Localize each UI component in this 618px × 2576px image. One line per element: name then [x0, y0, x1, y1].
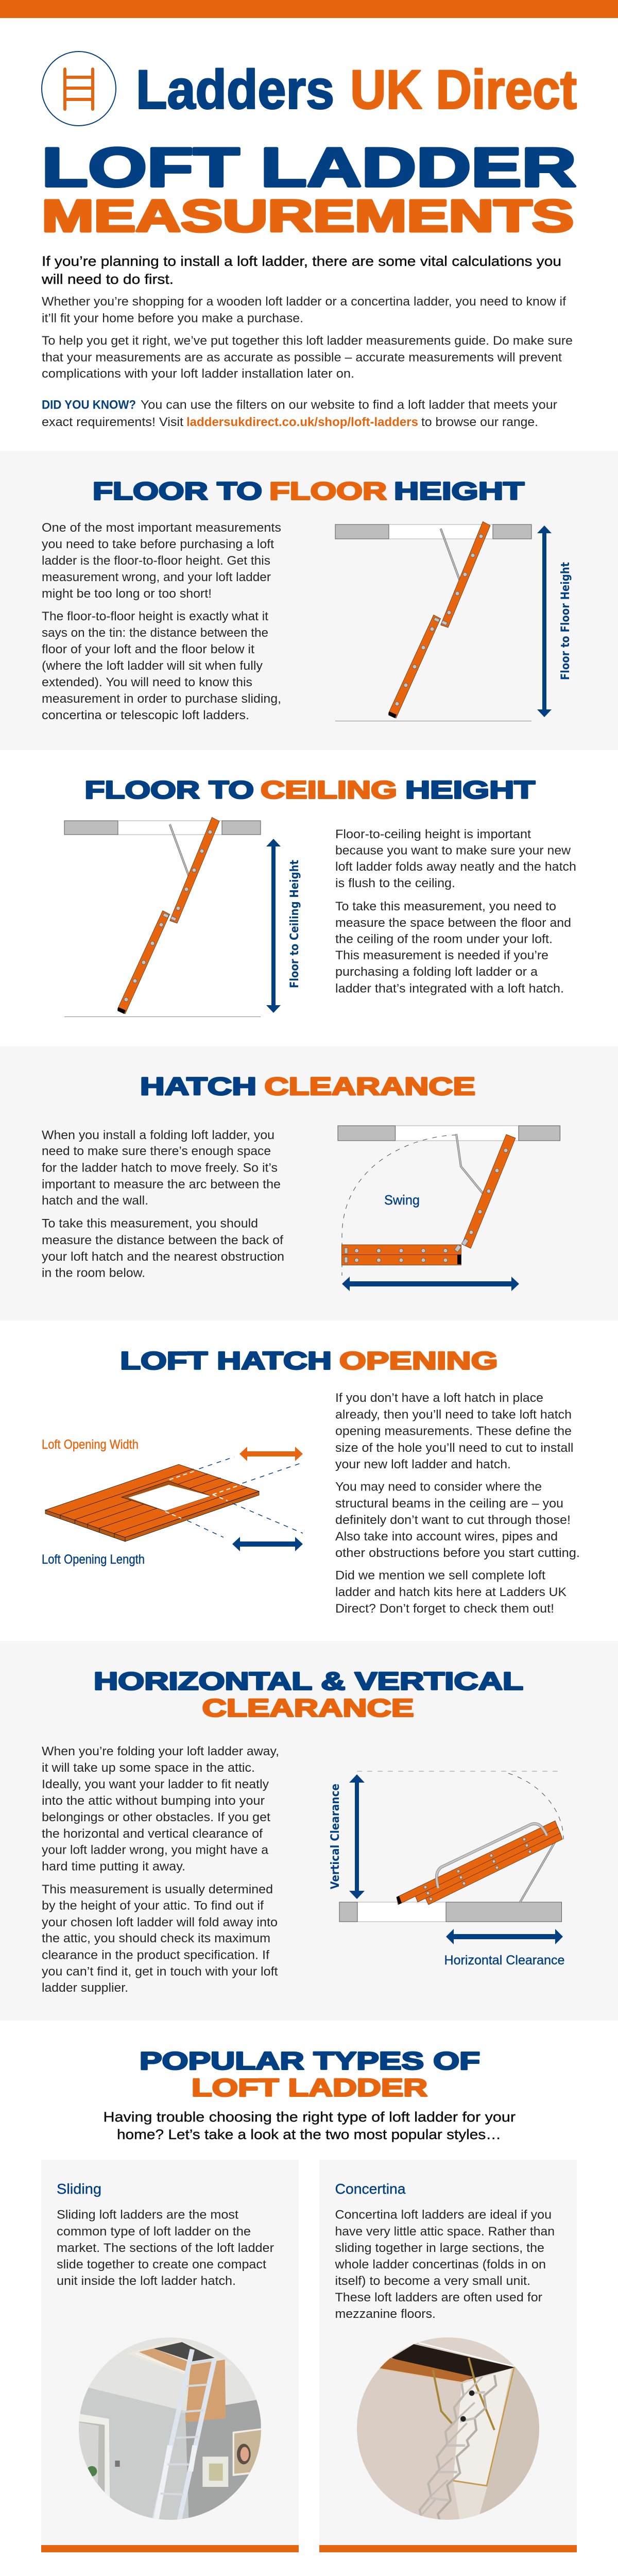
text: concertina	[334, 2208, 555, 2321]
intro body text: exact requirements! Visit	[42, 415, 183, 429]
heading: floor to ceiling height: HEIGHT	[405, 777, 535, 804]
text: floor to ceiling: loft ladder folds away neatly and the hatch	[335, 860, 576, 874]
text: clearance: the horizontal and vertical clearance of	[42, 1827, 263, 1841]
intro lead text: If you’re planning to install a loft ladder, there are some vital calculations you	[42, 253, 561, 269]
text: floor to floor: (where the loft ladder will sit when fully	[42, 659, 263, 673]
text: sliding: market. The sections of the loft ladder	[57, 2241, 274, 2255]
text: loft hatch opening: You may need to consider where the	[335, 1480, 542, 1494]
text: loft hatch opening: If you don’t have a loft hatch in place	[335, 1391, 543, 1405]
text: floor to floor: you need to take before purchasing a loft	[42, 537, 274, 551]
text: floor to floor: ladder is the floor-to-floor height. Get this	[42, 554, 270, 568]
text: clearance: your chosen loft ladder will fold away into	[42, 1916, 278, 1929]
text: floor to ceiling: is flush to the ceiling.	[335, 876, 455, 890]
heading: popular types of loft ladder	[140, 2047, 480, 2102]
heading: floor to floor height: FLOOR	[269, 478, 387, 505]
text: loft hatch opening: opening measurements. These define the	[335, 1425, 572, 1438]
heading: floor to floor height: FLOOR TO	[93, 478, 262, 505]
panel: hatch clearance	[0, 1046, 618, 1320]
text: concertina: itself) to become a very small unit.	[335, 2274, 530, 2288]
icon: ladder in circle	[42, 52, 116, 126]
text: sliding: common type of loft ladder on the	[57, 2225, 251, 2239]
heading: popular types of loft ladder: LOFT LADDER	[192, 2074, 427, 2102]
text: loft hatch opening: Direct? Don’t forget to check them out!	[335, 1602, 554, 1616]
arrow: floor to ceiling	[266, 839, 281, 1013]
text: concertina: whole ladder concertinas (folds in on	[334, 2258, 546, 2272]
logo wordmark	[136, 59, 577, 121]
arrow: opening width	[239, 1447, 303, 1461]
text: floor to floor: One of the most important measurements	[42, 521, 281, 535]
panel: horizontal and vertical clearance	[0, 1641, 618, 2021]
text: sliding: slide together to create one compact	[57, 2258, 266, 2272]
text: floor to ceiling: the ceiling of the room under your loft.	[335, 933, 553, 946]
text: loft hatch opening: Also take into account wires, pipes and	[335, 1530, 558, 1544]
intro body text: laddersukdirect.co.uk/shop/loft-ladders	[186, 415, 418, 429]
intro body text: complications with your loft ladder installation later on.	[42, 367, 354, 381]
text: floor to ceiling: measure the space between the floor and	[335, 916, 571, 930]
diagram: loft floor with opening	[45, 1457, 303, 1541]
text: floor to ceiling: Floor-to-ceiling height is important	[335, 827, 531, 841]
text: sliding: unit inside the loft ladder hatch.	[57, 2274, 236, 2288]
text: concertina: mezzanine floors.	[335, 2307, 436, 2321]
text: floor to floor: might be too long or too short!	[42, 587, 212, 601]
subheading: types: Having trouble choosing the right type of loft ladder for your	[103, 2109, 516, 2125]
text: concertina: have very little attic space. Rather than	[335, 2225, 555, 2239]
title: MEASUREMENTS	[42, 191, 574, 241]
label: floor to floor height: Floor to Floor Height	[559, 562, 572, 680]
text: concertina: These loft ladders are often used for	[335, 2291, 542, 2304]
text: clearance: into the attic without bumping into your	[42, 1794, 265, 1808]
text: floor to floor: says on the tin: the distance between the	[42, 626, 268, 640]
text: clearance: belongings or other obstacles. If you get	[42, 1810, 270, 1824]
title	[42, 136, 576, 241]
text: loft hatch opening: definitely don’t want to cut through those!	[335, 1513, 571, 1527]
subheading: types: home? Let’s take a look at the two most popular styles…	[117, 2127, 501, 2142]
card title: sliding: Sliding	[57, 2181, 101, 2197]
text: loft hatch opening: Did we mention we sell complete loft	[335, 1569, 545, 1583]
text: clearance: ladder supplier.	[42, 1981, 128, 1995]
text: clearance	[42, 1744, 279, 1995]
text: clearance: it will take up some space in the attic.	[42, 1761, 255, 1775]
label: vertical clearance: Vertical Clearance	[329, 1784, 342, 1889]
heading: popular types of loft ladder: POPULAR TYPES OF	[140, 2047, 480, 2075]
heading: floor to floor height: HEIGHT	[394, 478, 524, 505]
text: floor to floor	[42, 521, 281, 722]
heading: hatch clearance: CLEARANCE	[265, 1073, 475, 1100]
intro body text: it’ll fit your home before you make a purchase.	[42, 311, 303, 326]
text: hatch clearance	[42, 1128, 284, 1280]
text: clearance: the attic, you should check its maximum	[42, 1931, 270, 1945]
title: LOFT LADDER	[42, 136, 576, 198]
diagram: floor to ceiling ladder	[64, 817, 261, 1017]
panel: concertina	[319, 2160, 577, 2552]
label: loft opening width: Loft Opening Width	[42, 1437, 139, 1452]
text: hatch clearance: your loft hatch and the nearest obstruction	[42, 1250, 284, 1264]
text: hatch clearance: important to measure the arc between the	[42, 1178, 281, 1192]
text: floor to floor: concertina or telescopic loft ladders.	[42, 708, 249, 722]
text: floor to floor: extended). You will need to know this	[42, 675, 252, 689]
label: floor to ceiling height: Floor to Ceiling Height	[288, 860, 301, 988]
text: floor to ceiling: This measurement is needed if you’re	[335, 948, 548, 962]
text: clearance: When you’re folding your loft ladder away,	[42, 1744, 279, 1758]
text: loft hatch opening: your new loft ladder and hatch.	[335, 1458, 511, 1471]
heading: floor to ceiling height: CEILING	[261, 777, 397, 804]
panel: floor to floor height	[0, 451, 618, 750]
arrow: vertical clearance	[349, 1774, 365, 1899]
text: hatch clearance: hatch and the wall.	[42, 1194, 148, 1208]
heading: loft hatch opening: LOFT HATCH	[120, 1348, 332, 1375]
intro body text: To help you get it right, we’ve put together this loft ladder measurements guide. Do make sure	[42, 334, 573, 348]
photo: sliding ladder	[79, 2337, 261, 2520]
heading: horizontal and vertical clearance: CLEARANCE	[202, 1695, 414, 1722]
heading: loft hatch opening: OPENING	[339, 1348, 498, 1375]
intro body text: You can use the filters on our website to find a loft ladder that meets your	[141, 398, 557, 412]
text: floor to floor: measurement wrong, and your loft ladder	[42, 570, 271, 584]
card title: concertina: Concertina	[335, 2181, 406, 2197]
photo: concertina ladder	[357, 2337, 539, 2520]
intro lead text: will need to do first.	[41, 272, 174, 287]
text: hatch clearance: When you install a folding loft ladder, you	[42, 1128, 274, 1142]
text: floor to ceiling: ladder that’s integrated with a loft hatch.	[335, 982, 564, 995]
text: floor to ceiling: To take this measurement, you need to	[335, 900, 556, 913]
heading: loft hatch opening	[120, 1348, 498, 1375]
text: clearance: clearance in the product specification. If	[42, 1948, 269, 1962]
text: sliding	[57, 2208, 274, 2288]
intro body text: to browse our range.	[421, 415, 538, 429]
heading: horizontal and vertical clearance	[94, 1668, 523, 1722]
logo wordmark: Ladders	[136, 59, 334, 121]
arrow: opening length	[232, 1537, 303, 1551]
text: hatch clearance: in the room below.	[42, 1266, 145, 1280]
text: loft hatch opening: already, then you’ll need to take loft hatch	[335, 1408, 572, 1422]
intro lead text	[41, 253, 561, 287]
text: concertina: sliding together in large sections, the	[335, 2241, 544, 2255]
text: floor to ceiling: purchasing a folding loft ladder or a	[335, 965, 538, 979]
text: clearance: Ideally, you want your ladder to fit neatly	[42, 1777, 269, 1791]
text: clearance: hard time putting it away.	[42, 1860, 185, 1874]
text: loft hatch opening: ladder and hatch kits here at Ladders UK	[335, 1585, 566, 1599]
heading: floor to ceiling height	[84, 777, 535, 804]
logo	[42, 52, 577, 126]
text: floor to floor: measurement in order to purchase sliding,	[42, 692, 281, 706]
heading: hatch clearance	[140, 1073, 475, 1100]
section: loft hatch opening	[42, 1348, 580, 1616]
arrow: floor to floor	[537, 526, 552, 717]
label: swing: Swing	[384, 1192, 420, 1208]
text: clearance: This measurement is usually determined	[42, 1883, 273, 1896]
arrow: hatch clearance	[342, 1277, 519, 1291]
intro body text: that your measurements are as accurate as possible – accurate measurements will prevent	[42, 350, 562, 365]
section: floor to ceiling height	[64, 777, 576, 1017]
logo wordmark: UK Direct	[350, 59, 577, 121]
text: hatch clearance: measure the distance between the back of	[42, 1233, 283, 1247]
heading: horizontal and vertical clearance: HORIZONTAL & VERTICAL	[94, 1668, 523, 1695]
intro body text: DID YOU KNOW?	[42, 398, 136, 412]
heading: hatch clearance: HATCH	[140, 1073, 256, 1100]
intro body text: Whether you’re shopping for a wooden loft ladder or a concertina ladder, you need to know if	[42, 295, 566, 309]
intro body text	[42, 295, 573, 429]
diagram: folded ladder in attic	[339, 1771, 563, 1922]
text: floor to floor: floor of your loft and the floor below it	[42, 642, 254, 656]
text: floor to ceiling	[335, 827, 576, 995]
panel: sliding	[41, 2160, 299, 2552]
label: horizontal clearance: Horizontal Clearance	[444, 1953, 564, 1968]
text: hatch clearance: need to make sure there’s enough space	[42, 1144, 271, 1158]
text: sliding: Sliding loft ladders are the most	[57, 2208, 238, 2222]
diagram: hatch swing	[338, 1126, 560, 1276]
arrow: horizontal clearance	[446, 1929, 563, 1944]
label: loft opening length: Loft Opening Length	[42, 1552, 145, 1567]
text: floor to ceiling: because you want to make sure your new	[335, 844, 571, 857]
text: loft hatch opening: structural beams in the ceiling are – you	[335, 1497, 563, 1511]
text: clearance: you can’t find it, get in touch with your loft	[42, 1965, 278, 1979]
text: clearance: your loft ladder wrong, you might have a	[42, 1843, 269, 1857]
heading: floor to floor height	[93, 478, 524, 505]
heading: floor to ceiling height: FLOOR TO	[84, 777, 254, 804]
text: loft hatch opening: size of the hole you’ll need to cut to install	[335, 1441, 574, 1455]
text: floor to floor: The floor-to-floor height is exactly what it	[42, 609, 268, 623]
text: hatch clearance: for the ladder hatch to move freely. So it’s	[42, 1161, 278, 1175]
subheading: types	[103, 2109, 516, 2142]
text: hatch clearance: To take this measurement, you should	[42, 1217, 258, 1231]
top orange bar	[0, 0, 618, 18]
text: loft hatch opening	[335, 1391, 580, 1616]
diagram: floor to floor ladder	[335, 521, 531, 721]
text: clearance: by the height of your attic. To find out if	[42, 1899, 264, 1913]
text: loft hatch opening: other obstructions before you start cutting.	[335, 1546, 580, 1560]
text: concertina: Concertina loft ladders are ideal if you	[335, 2208, 552, 2222]
